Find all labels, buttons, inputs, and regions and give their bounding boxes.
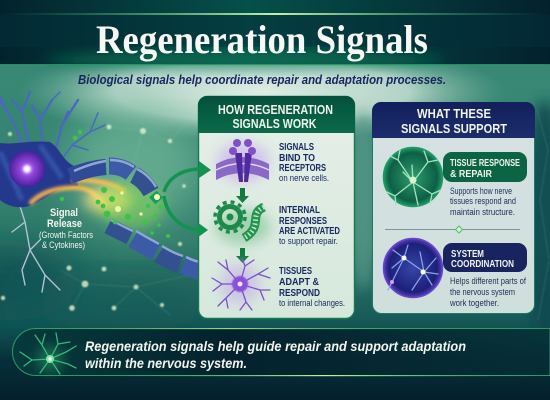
step 3 text: ADAPT & [279,277,319,288]
panel header: WHAT THESE [417,106,491,121]
icon: blue coordination disc [384,238,442,298]
system coordination label: COORDINATION [451,259,514,270]
banner text [85,338,466,371]
signal release label [39,207,93,250]
icon: gear and DNA [215,202,271,245]
tissue response label [443,152,527,182]
tissue response text [450,186,516,217]
panel header: HOW REGENERATION [218,102,333,117]
illustration: neuron releasing signals [0,92,200,292]
step 2 text: to support repair. [279,236,338,246]
nucleus [9,151,45,187]
panel: how regeneration signals work [198,96,355,318]
step 2 text: RESPONSES [279,216,327,227]
step 1 text: on nerve cells. [279,173,329,183]
banner text: within the nervous system. [85,355,247,371]
lower axon [108,220,200,271]
green signal cloud [100,181,164,229]
step 3 text: TISSUES [279,266,312,277]
step 1 text: BIND TO [279,153,315,164]
banner text: Regeneration signals help guide repair and support adaptation [85,338,466,354]
system coordination text: the nervous system [450,287,515,297]
step 1 text: RECEPTORS [279,163,326,174]
title band [0,0,550,68]
icon: green neuron [20,333,76,374]
step 1 text [279,142,329,183]
tissue response text: Supports how nerve [450,186,512,196]
icon: green tissue disc [384,148,442,206]
system coordination text: Helps different parts of [450,276,526,286]
tissue response text: maintain structure. [450,207,515,217]
icon: purple neuron [212,258,270,310]
system coordination label: SYSTEM [451,249,484,260]
signal sparkles [115,191,160,216]
system coordination text: work together. [449,298,499,308]
curved arrows to panel [164,161,211,238]
tissue response text: tissues respond and [450,196,516,206]
panel header: SIGNALS SUPPORT [401,121,507,136]
title: Regeneration Signals [96,17,428,62]
tissue response label: & REPAIR [450,169,493,180]
step 3 text: RESPOND [279,288,320,299]
signal release label: Signal [50,207,78,219]
neuron dendrites [0,92,105,165]
bright release point [84,187,132,213]
step 2 text: INTERNAL [279,205,320,216]
panel header [198,96,355,133]
subtitle: Biological signals help coordinate repair and adaptation processes. [78,72,446,87]
lower dendrites [12,200,60,292]
step 3 text [279,266,345,308]
step 1 text: SIGNALS [279,142,314,153]
icon: receptor [216,139,269,182]
signal release label: (Growth Factors [39,230,93,240]
nucleus glow [23,165,31,173]
step 2 text [279,205,340,246]
signal molecules [60,130,170,238]
step 3 text: to internal changes. [279,298,345,308]
orange signal glow [30,180,125,206]
system coordination label [443,243,527,272]
upper axon [70,160,159,201]
signal release label: Release [47,218,82,230]
signal release label: & Cytokines) [42,240,85,250]
step 2 text: ARE ACTIVATED [279,226,340,237]
panel header [372,102,535,138]
tissue response label: TISSUE RESPONSE [450,158,520,169]
bottom banner [12,328,550,376]
panel header: SIGNALS WORK [232,116,317,131]
arrow: step 1 to 2 [236,188,249,203]
arrow: step 2 to 3 [236,248,249,263]
neuron body [0,142,78,207]
system coordination text [449,276,526,308]
panel: what these signals support [372,102,535,314]
